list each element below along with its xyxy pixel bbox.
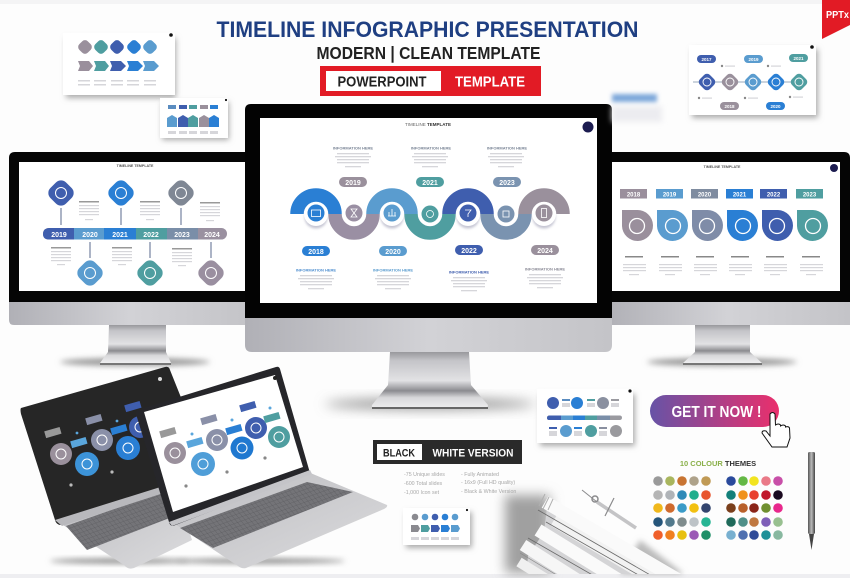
black white version banner: WHITE VERSION — [432, 448, 514, 460]
feature list: -1,000 Icon set — [404, 490, 440, 496]
text columns — [623, 256, 823, 275]
monitor: center wave timeline — [245, 104, 612, 409]
timeline bar with years: 2023 — [174, 232, 190, 239]
blueprint rolls with compass — [505, 490, 686, 578]
card: top-right slide with diamonds and pills — [689, 45, 818, 118]
card: top-right slide with diamonds and pills: 2021 — [793, 56, 804, 61]
pptx corner ribbon — [822, 0, 850, 39]
card: top-right slide with diamonds and pills: 2018 — [724, 104, 735, 109]
bottom info blocks: INFORMATION HERE — [373, 268, 413, 272]
year pills: 2022 — [461, 248, 477, 255]
timeline bar with years — [43, 228, 227, 240]
laptop: white version — [136, 367, 387, 568]
card: top-right slide with diamonds and pills: 2017 — [701, 57, 712, 62]
blurred small card — [612, 94, 662, 122]
bottom strip — [0, 574, 850, 578]
powerpoint template banner: TEMPLATE — [455, 74, 525, 90]
card: top-left slide with diamonds and arrows — [63, 33, 176, 98]
stems — [61, 208, 211, 258]
top strip — [0, 0, 850, 4]
feature list: -75 Unique slides — [404, 472, 445, 478]
colour swatches — [653, 476, 783, 540]
year boxes: 2021 — [733, 192, 747, 198]
feature list: - Fully Animated — [461, 472, 499, 478]
dark laptop markers — [44, 401, 151, 487]
right screen title: TIMELINE TEMPLATE — [704, 165, 741, 169]
black white version banner — [373, 440, 522, 464]
timeline bar with years: 2020 — [82, 232, 98, 239]
dark badge — [830, 164, 838, 172]
bottom info blocks: INFORMATION HERE — [525, 266, 565, 272]
top info blocks: INFORMATION HERE — [411, 146, 451, 150]
feature list — [404, 472, 516, 496]
timeline bar with years: 2024 — [204, 232, 220, 239]
card: small slide with circles and arrows — [403, 508, 472, 548]
center slide title: TIMELINE TEMPLATE — [405, 122, 451, 127]
timeline bar with years: 2019 — [51, 232, 67, 239]
card: top-right slide with diamonds and pills: 2019 — [748, 57, 759, 62]
card: top-right slide with diamonds and pills: 2020 — [770, 104, 781, 109]
feature list: - Black & White Version — [461, 489, 516, 495]
timeline bar with years: 2022 — [143, 232, 159, 239]
year pills: 2021 — [422, 180, 438, 187]
diamond markers — [45, 177, 227, 289]
get it now button: GET IT NOW ! — [672, 404, 762, 421]
year pills: 2020 — [385, 249, 401, 256]
monitor: left timeline bar design — [9, 152, 250, 366]
laptop: dark version — [20, 367, 210, 569]
year boxes: 2019 — [663, 192, 677, 198]
drop markers — [622, 210, 828, 241]
timeline bar with years: 2021 — [112, 232, 128, 239]
info text blocks — [51, 201, 220, 266]
year boxes: 2020 — [698, 192, 712, 198]
left screen title: TIMELINE TEMPLATE — [117, 164, 154, 168]
year boxes: 2023 — [803, 192, 817, 198]
colour themes heading: 10 COLOUR THEMES — [680, 459, 756, 468]
year pills: 2018 — [308, 249, 324, 256]
white laptop markers — [159, 401, 290, 488]
year boxes: 2018 — [627, 192, 641, 198]
feature list: - 16x9 (Full HD quality) — [461, 480, 515, 486]
card: small slide with house shapes — [160, 98, 229, 140]
year boxes — [620, 189, 823, 198]
year pills: 2023 — [499, 180, 515, 187]
bottom info blocks: INFORMATION HERE — [296, 268, 336, 272]
title: TIMELINE INFOGRAPHIC PRESENTATION — [216, 17, 638, 42]
bottom info blocks: INFORMATION HERE — [449, 270, 489, 274]
wave circles with icons — [304, 201, 556, 228]
subtitle: MODERN | CLEAN TEMPLATE — [316, 43, 540, 63]
year pills: 2019 — [345, 180, 361, 187]
wave ribbon — [297, 195, 563, 233]
feature list: -600 Total slides — [404, 481, 443, 487]
monitor: right drop design — [605, 152, 850, 366]
year pills: 2024 — [537, 248, 553, 255]
card: slide with timeline bar — [537, 389, 635, 446]
powerpoint template banner: POWERPOINT — [338, 74, 426, 90]
powerpoint template banner — [320, 66, 541, 96]
icon: hand cursor — [762, 412, 790, 447]
bottom info blocks — [296, 266, 565, 291]
top info blocks — [333, 146, 527, 167]
top info blocks: INFORMATION HERE — [333, 146, 373, 150]
get it now button — [650, 395, 779, 427]
dark badge — [582, 122, 594, 132]
year boxes: 2022 — [767, 192, 781, 198]
year pills — [302, 177, 559, 256]
top info blocks: INFORMATION HERE — [487, 146, 527, 150]
compass — [582, 490, 636, 528]
black white version banner: BLACK — [383, 448, 415, 460]
icon: pen — [808, 452, 815, 550]
